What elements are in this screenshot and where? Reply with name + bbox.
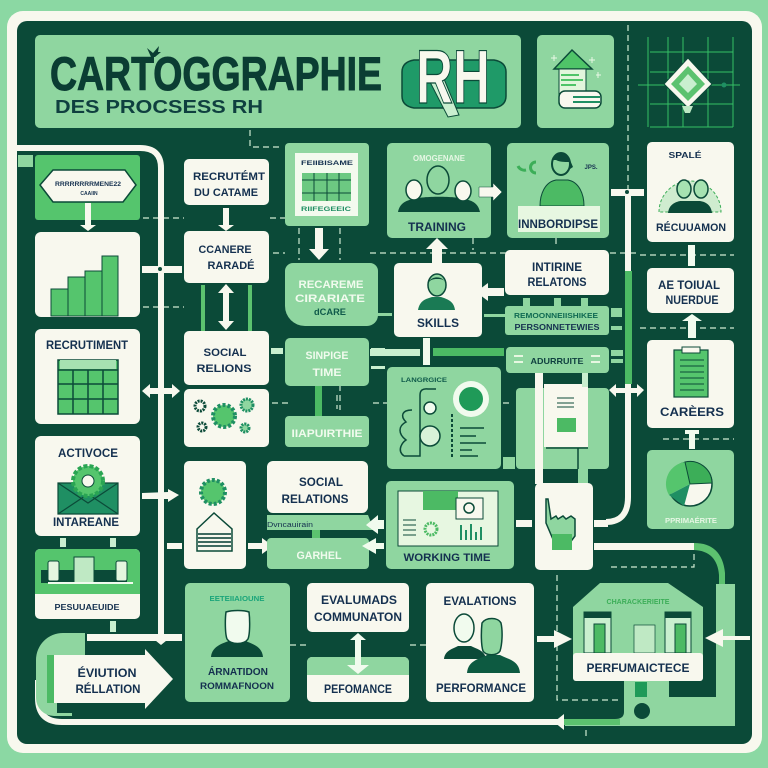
- panel: evalations performance: [426, 583, 534, 702]
- panel: skills: [394, 263, 482, 337]
- icon: three people: [398, 166, 480, 212]
- panel: working time: [386, 481, 514, 569]
- panel: sign: [18, 155, 140, 220]
- connector lines: [143, 25, 734, 740]
- panel: document tall: [503, 373, 609, 484]
- panel: simpige time: [285, 338, 369, 386]
- panel: eval person: [185, 583, 290, 702]
- arrow: left main head: [150, 636, 172, 645]
- icon: badge: [453, 381, 489, 417]
- panel: lower right bracket: [565, 584, 735, 726]
- icon: document: [544, 384, 588, 483]
- panel: language: [387, 367, 501, 469]
- connectors: [582, 373, 588, 387]
- icon: envelope list: [197, 513, 232, 551]
- panel: evalations performance: EVALATIONS: [444, 596, 517, 608]
- panel: iiapuirthie: [285, 416, 369, 447]
- box: ae toual nuerdue: NUERDUE: [666, 293, 718, 307]
- panel: careers: CARÈERS: [660, 404, 724, 419]
- pie chart: [666, 461, 712, 506]
- box: social relations: SOCIAL: [299, 475, 343, 489]
- icon: badge inner: [459, 387, 483, 411]
- connector: [611, 350, 623, 363]
- bar: green: [635, 682, 647, 697]
- label: ÉVIUTION: [78, 665, 136, 680]
- arrows: converging: [362, 515, 384, 554]
- arrow: right: [479, 183, 502, 201]
- subtitle: DES PROCSESS RH: [55, 97, 263, 117]
- panel: evolution relation: RÉLLATION: [76, 681, 140, 696]
- table: [302, 173, 351, 201]
- connectors: [60, 538, 116, 632]
- icon: person: [518, 153, 584, 206]
- panel: spalé: SPALÉ: [668, 150, 702, 160]
- pipes: skills to adjacent: [370, 338, 504, 365]
- arrow banner: [54, 649, 173, 709]
- arrow: double horizontal: [609, 384, 644, 397]
- arrow: double vertical: [218, 284, 234, 330]
- panel: careers: [647, 340, 734, 428]
- pipe: left main: [17, 148, 161, 640]
- illustration: dashboard: [398, 491, 498, 546]
- panel: spalé: RÉCUUAMON: [656, 221, 726, 234]
- panel: bar chart: [35, 232, 140, 317]
- box: social relations: RELATIONS: [282, 492, 348, 506]
- pipe: lower right: [594, 543, 725, 597]
- RH logo: RH: [416, 35, 490, 120]
- panel: personnel: PERSONNETEWIES: [514, 323, 600, 332]
- icon: envelope and gear: [58, 466, 118, 514]
- icon: two people: [444, 614, 520, 673]
- panel: spalé: [647, 142, 734, 242]
- icon: map grid: [638, 37, 740, 127]
- label: ACTIVOCE: [58, 446, 118, 460]
- box: ccanere: [184, 231, 269, 283]
- panel: spreadsheet: RIIFEGEEIC: [301, 207, 352, 213]
- panel: adurruite: ADURRUITE: [530, 356, 584, 366]
- panel: sign: RRRRRRRRMENE22: [55, 182, 122, 188]
- icon: hand: [546, 499, 575, 550]
- arrow: down: [80, 203, 96, 231]
- panel: recareme: RECAREME: [298, 279, 364, 291]
- bar: vertical connector: [315, 386, 322, 416]
- label: RECRUTIMENT: [46, 338, 129, 352]
- panel: hand: [535, 483, 593, 570]
- panel: spreadsheet: [285, 143, 369, 226]
- arrow: double horizontal: [142, 384, 180, 398]
- icon: person: [211, 610, 263, 657]
- panel: spreadsheet: FEIIBISAME: [301, 161, 353, 167]
- panel: adurruite: [506, 347, 609, 373]
- arrow: left: [476, 283, 504, 301]
- box: recrutement: DU CATAME: [194, 187, 258, 199]
- panel: recareme: CIRARIATE: [295, 293, 365, 305]
- box: evaluation communication: EVALUMADS: [321, 593, 397, 607]
- panel: pie chart: [647, 450, 734, 529]
- box: recrutement: RECRUTÉMT: [193, 170, 265, 183]
- panel: training: [387, 143, 491, 238]
- arrow: up: [682, 314, 702, 338]
- sign: [40, 170, 136, 202]
- panel: simpige time: TIME: [312, 367, 342, 379]
- connector: small pipe: [685, 430, 699, 449]
- icon: calendar: [58, 360, 118, 414]
- icon: house and book: [551, 50, 601, 108]
- panel: activoce: [35, 436, 140, 536]
- connectors: [370, 298, 622, 330]
- connector: pipe cross: [142, 266, 182, 273]
- illustration: doors: [584, 612, 691, 653]
- box: intirine relatons: INTIRINE: [532, 260, 582, 274]
- box: evaluation communication: COMMUNATON: [314, 610, 402, 624]
- bar chart: [51, 256, 118, 316]
- panel: eval person: EETEIIAIOUNE: [210, 596, 265, 603]
- box: ccanere: CCANERE: [198, 244, 252, 256]
- icon: clipboard: [674, 347, 708, 397]
- lines: green verticals: [201, 285, 252, 331]
- panel: recareme: [285, 263, 378, 326]
- icon: gears: [201, 480, 225, 504]
- panel: language: LANGRGICE: [401, 377, 448, 384]
- panel: sign: CAAIIN: [80, 191, 98, 197]
- panel: working time: WORKING TIME: [404, 552, 490, 564]
- panel: personnel: [505, 306, 609, 335]
- panel: personnel: REMOONNEIISHIKEE: [514, 313, 598, 320]
- banner: dvncauirain: [267, 515, 374, 538]
- arrow: left into performance: [705, 629, 750, 647]
- panel: training: TRAINING: [408, 220, 466, 234]
- box: tall icon panel: [184, 461, 246, 569]
- box: ae toual nuerdue: [647, 268, 734, 313]
- panel: training: OMOGENANE: [413, 154, 466, 163]
- panel: recareme: dCARE: [314, 307, 346, 317]
- icon: person: [418, 274, 455, 310]
- connector: pipe cross: [611, 189, 644, 196]
- box: social relions: SOCIAL: [204, 347, 247, 359]
- icon: bird: [147, 46, 161, 57]
- connectors: [271, 348, 385, 369]
- arrow: bottom head: [554, 714, 564, 730]
- pipe: green section: [625, 271, 632, 384]
- box: social relions: [184, 331, 269, 385]
- panel: eval person: ROMMAFNOON: [200, 681, 274, 692]
- label: INTAREANE: [53, 515, 119, 529]
- box: gears: [184, 389, 269, 447]
- arrow: right into performance: [537, 630, 572, 648]
- box: social relations: [267, 461, 368, 513]
- panel: skills: SKILLS: [417, 316, 459, 330]
- box: ccanere: RARADÉ: [208, 259, 254, 272]
- connector: [516, 520, 608, 527]
- text lines: [460, 428, 486, 456]
- arrow: down: [309, 228, 329, 260]
- panel: pesuuaeuide: [35, 549, 140, 619]
- box: intirine relatons: RELATONS: [528, 275, 586, 289]
- pipe: bottom gradient: [560, 719, 620, 725]
- arrow: double vertical: [347, 633, 369, 674]
- panel: iiapuirthie: IIAPUIRTHIE: [292, 428, 362, 440]
- label: PESUUAEUIDE: [54, 603, 120, 612]
- icon: small circle: [634, 703, 650, 719]
- panel: innbordipse: [507, 143, 609, 238]
- arrow: down: [218, 208, 234, 231]
- box: pefomance: [307, 657, 409, 702]
- pipe: bottom return: [38, 680, 565, 722]
- panel: performance building: CHARACKERIEITE: [606, 599, 670, 606]
- panel: performance building: PERFUMAICTECE: [586, 663, 690, 675]
- box: evaluation communication: [307, 583, 409, 632]
- arrow: up: [426, 238, 448, 263]
- icon: head puzzle: [400, 389, 440, 456]
- box: recrutement: [184, 159, 269, 205]
- panel: pie chart: PPRIMAÉRITE: [665, 516, 717, 525]
- connector: small pipe: [688, 245, 695, 266]
- panel: evolution relation: [36, 633, 182, 716]
- icon: two people: [659, 180, 721, 213]
- box: intirine relatons: [505, 250, 609, 295]
- pipe: right vertical: [606, 196, 628, 522]
- label panel: carhel: GARHEL: [296, 550, 342, 562]
- title panel: [35, 35, 521, 128]
- panel: evalations performance: PERFORMANCE: [436, 683, 526, 695]
- banner: dvncauirain: Dvncauirain: [267, 522, 313, 529]
- box: ae toual nuerdue: AE TOIUAL: [658, 278, 720, 292]
- box: pefomance: PEFOMANCE: [324, 682, 392, 696]
- box: social relions: RELIONS: [196, 363, 252, 375]
- pipes: [535, 373, 543, 484]
- panel: performance building: [573, 583, 703, 681]
- panel: house icon: [537, 35, 614, 128]
- label panel: carhel: [267, 538, 369, 569]
- panel: innbordipse: JPS.: [584, 165, 598, 171]
- panel: eval person: ÁRNATIDON: [208, 665, 268, 678]
- icon: gears: [195, 399, 253, 432]
- panel: innbordipse: INNBORDIPSE: [518, 217, 598, 231]
- panel: simpige time: SINPIGE: [306, 350, 348, 362]
- icon: devices: [41, 557, 133, 583]
- title: CARTOGGRAPHIE: [50, 47, 382, 100]
- panel: recruitment: [35, 329, 140, 424]
- connector and arrows: [142, 489, 273, 554]
